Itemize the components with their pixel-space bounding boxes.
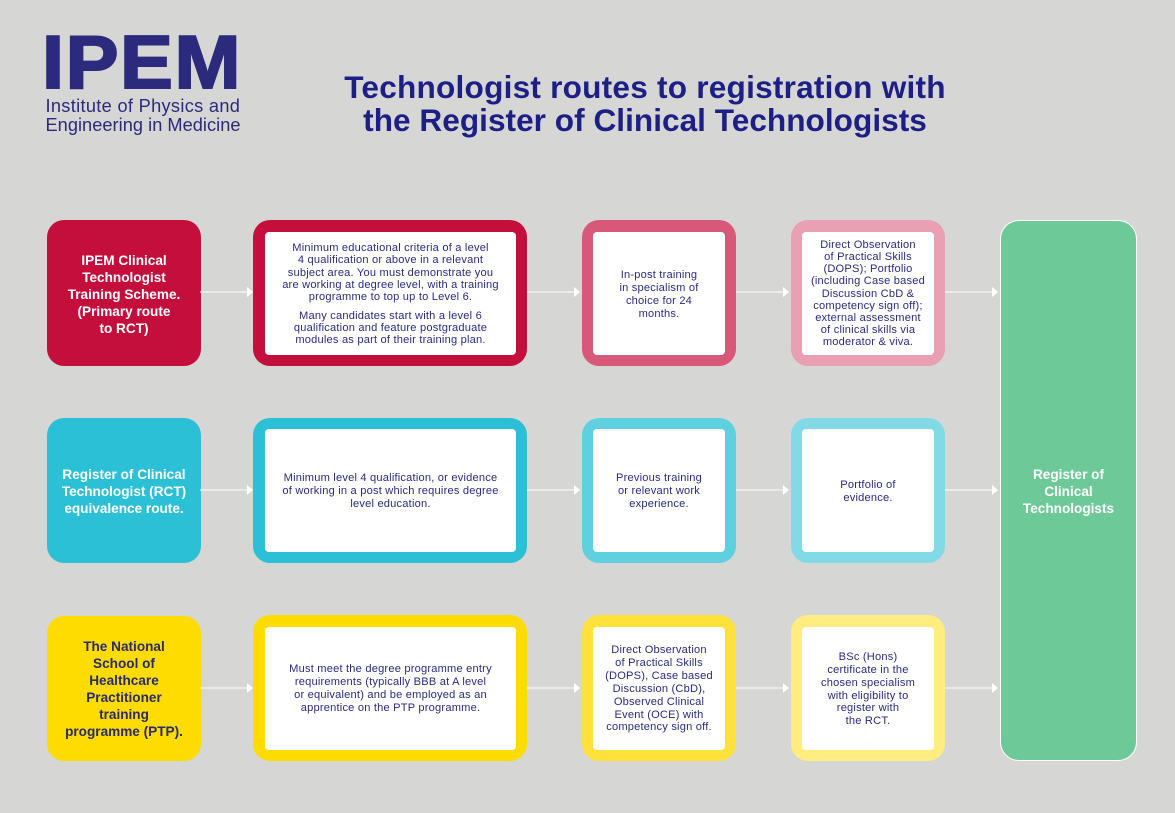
- arrow: row 1 step 1: [200, 287, 253, 297]
- logo: IPEM: [42, 20, 242, 135]
- row 1 card: in-post training: [582, 220, 736, 366]
- panel: Register of Clinical Technologists: Clinical: [1044, 484, 1093, 499]
- row 2 card: minimum qualification: [253, 418, 527, 563]
- row 1 card: assessment: moderator & viva.: [823, 336, 913, 348]
- row 3 heading: National School of Healthcare PTP: Practitioner: [86, 690, 162, 705]
- row 2 card: minimum qualification: Minimum level 4 qualification, or evidence: [284, 472, 497, 484]
- row 3 card: BSc certificate: chosen specialism: [821, 677, 915, 689]
- panel: Register of Clinical Technologists: Technologists: [1023, 501, 1114, 516]
- row 1 card: educational criteria: programme to top up to Level 6.: [309, 291, 472, 303]
- row 3 card: observation and discussion: Direct Observation: [611, 644, 707, 656]
- row 3 card: degree entry requirements: [253, 615, 527, 761]
- arrow: row 3 to register: [945, 683, 998, 693]
- row 2 heading: RCT equivalence route: Register of Clinical: [62, 466, 186, 482]
- row 1 card: assessment: competency sign off);: [813, 300, 923, 312]
- row 3 card: BSc certificate: with eligibility to: [828, 690, 908, 702]
- row 3 card: observation and discussion: Event (OCE) with: [615, 709, 703, 721]
- arrow: row 1 step 2: [527, 287, 580, 297]
- row 1 card: educational criteria: Many candidates start with a level 6: [299, 310, 482, 322]
- panel: Register of Clinical Technologists: Register of: [1033, 466, 1104, 482]
- row 3 card: degree entry requirements: or equivalent) and be employed as an: [294, 689, 487, 701]
- arrow: row 2 step 1: [200, 485, 253, 495]
- arrow: row 3 step 1: [200, 683, 253, 693]
- row 3 card: BSc certificate: register with: [837, 702, 899, 714]
- row 3 card: BSc certificate: the RCT.: [846, 715, 890, 727]
- row 3 heading: National School of Healthcare PTP: The National: [83, 638, 165, 654]
- row 1 card: assessment: of clinical skills via: [821, 324, 915, 336]
- row 1 card: in-post training: in specialism of: [619, 282, 699, 294]
- row 3 card: observation and discussion: of Practical Skills: [615, 657, 703, 669]
- logo strapline: Engineering in Medicine: [46, 115, 241, 135]
- row 1 card: educational criteria: subject area. You must demonstrate you: [288, 266, 493, 278]
- row 3 card: BSc certificate: [791, 615, 945, 761]
- row 3 card: degree entry requirements: Must meet the degree programme entry: [289, 663, 492, 675]
- row 1 card: assessment: (including Case based: [811, 275, 925, 287]
- title: the Register of Clinical Technologists: [363, 102, 927, 138]
- row 1 heading: IPEM Clinical Technologist Training Scheme: [47, 220, 201, 366]
- row 1 card: assessment: of Practical Skills: [824, 251, 912, 263]
- row 2 card: portfolio: Portfolio of: [840, 479, 896, 491]
- arrow: row 1 to register: [945, 287, 998, 297]
- row 1 card: assessment: (DOPS); Portfolio: [823, 263, 913, 275]
- logo wordmark: IPEM: [42, 20, 242, 104]
- row 2 card: previous training: Previous training: [616, 472, 702, 484]
- row 3 heading: National School of Healthcare PTP: School of: [93, 656, 155, 671]
- row 3 card: observation and discussion: Observed Clinical: [614, 696, 704, 708]
- arrow: row 2 step 3: [736, 485, 789, 495]
- arrow: row 1 step 3: [736, 287, 789, 297]
- row 2 card: minimum qualification: of working in a post which requires degree: [282, 485, 499, 497]
- row 1 card: educational criteria: modules as part of their training plan.: [295, 334, 486, 346]
- row 2 card: previous training: experience.: [629, 498, 689, 510]
- arrow: row 3 step 3: [736, 683, 789, 693]
- panel: Register of Clinical Technologists: [1000, 220, 1137, 761]
- title: [344, 69, 946, 138]
- row 3 card: observation and discussion: [582, 615, 736, 761]
- row 1 heading: IPEM Clinical Technologist Training Scheme: (Primary route: [78, 304, 170, 319]
- row 1 card: in-post training: In-post training: [621, 268, 697, 280]
- row 1 card: assessment: [791, 220, 945, 366]
- row 1 card: educational criteria: are working at degree level, with a training: [282, 279, 499, 291]
- row 3 heading: National School of Healthcare PTP: programme (PTP).: [65, 724, 183, 739]
- row 3 card: observation and discussion: competency sign off.: [606, 721, 712, 733]
- row 3 card: BSc certificate: certificate in the: [827, 664, 909, 676]
- row 1 card: assessment: external assessment: [815, 312, 921, 324]
- row 3 card: BSc certificate: BSc (Hons): [839, 651, 897, 663]
- row 1 heading: IPEM Clinical Technologist Training Scheme: to RCT): [99, 321, 149, 336]
- row 3 card: degree entry requirements: requirements (typically BBB at A level: [295, 676, 486, 688]
- row 2 card: minimum qualification: level education.: [350, 498, 431, 510]
- row 1 heading: IPEM Clinical Technologist Training Scheme: IPEM Clinical: [81, 253, 167, 268]
- row 1 card: assessment: Discussion CbD &: [822, 288, 914, 300]
- row 2 heading: RCT equivalence route: equivalence route.: [64, 501, 184, 516]
- title: Technologist routes to registration with: [344, 69, 946, 105]
- row 1 card: in-post training: choice for 24: [626, 294, 692, 306]
- row 3 heading: National School of Healthcare PTP: [47, 616, 201, 761]
- row 3 card: observation and discussion: Discussion (CbD),: [613, 683, 705, 695]
- row 1 heading: IPEM Clinical Technologist Training Scheme: Technologist: [82, 270, 166, 285]
- row 1 card: educational criteria: [253, 220, 527, 366]
- row 2 card: previous training: [582, 418, 736, 563]
- row 1 card: educational criteria: qualification and feature postgraduate: [294, 322, 487, 334]
- logo strapline: Institute of Physics and: [46, 96, 240, 116]
- row 2 heading: RCT equivalence route: [47, 418, 201, 563]
- arrow: row 3 step 2: [527, 683, 580, 693]
- row 1 card: assessment: Direct Observation: [820, 239, 916, 251]
- row 3 card: observation and discussion: (DOPS), Case based: [605, 670, 713, 682]
- row 2 card: previous training: or relevant work: [618, 485, 700, 497]
- row 1 card: educational criteria: Minimum educational criteria of a level: [292, 242, 489, 254]
- row 2 card: portfolio: [791, 418, 945, 563]
- row 3 card: degree entry requirements: apprentice on the PTP programme.: [301, 702, 480, 714]
- row 1 card: in-post training: months.: [639, 308, 679, 320]
- row 3 heading: National School of Healthcare PTP: Healthcare: [89, 673, 159, 688]
- row 2 heading: RCT equivalence route: Technologist (RCT): [62, 484, 186, 499]
- row 2 card: portfolio: evidence.: [843, 492, 893, 504]
- arrow: row 2 step 2: [527, 485, 580, 495]
- row 3 heading: National School of Healthcare PTP: training: [99, 707, 149, 722]
- logo strapline: [46, 96, 241, 135]
- row 1 heading: IPEM Clinical Technologist Training Scheme: Training Scheme.: [68, 287, 180, 302]
- arrow: row 2 to register: [945, 485, 998, 495]
- row 1 card: educational criteria: 4 qualification or above in a relevant: [298, 254, 483, 266]
